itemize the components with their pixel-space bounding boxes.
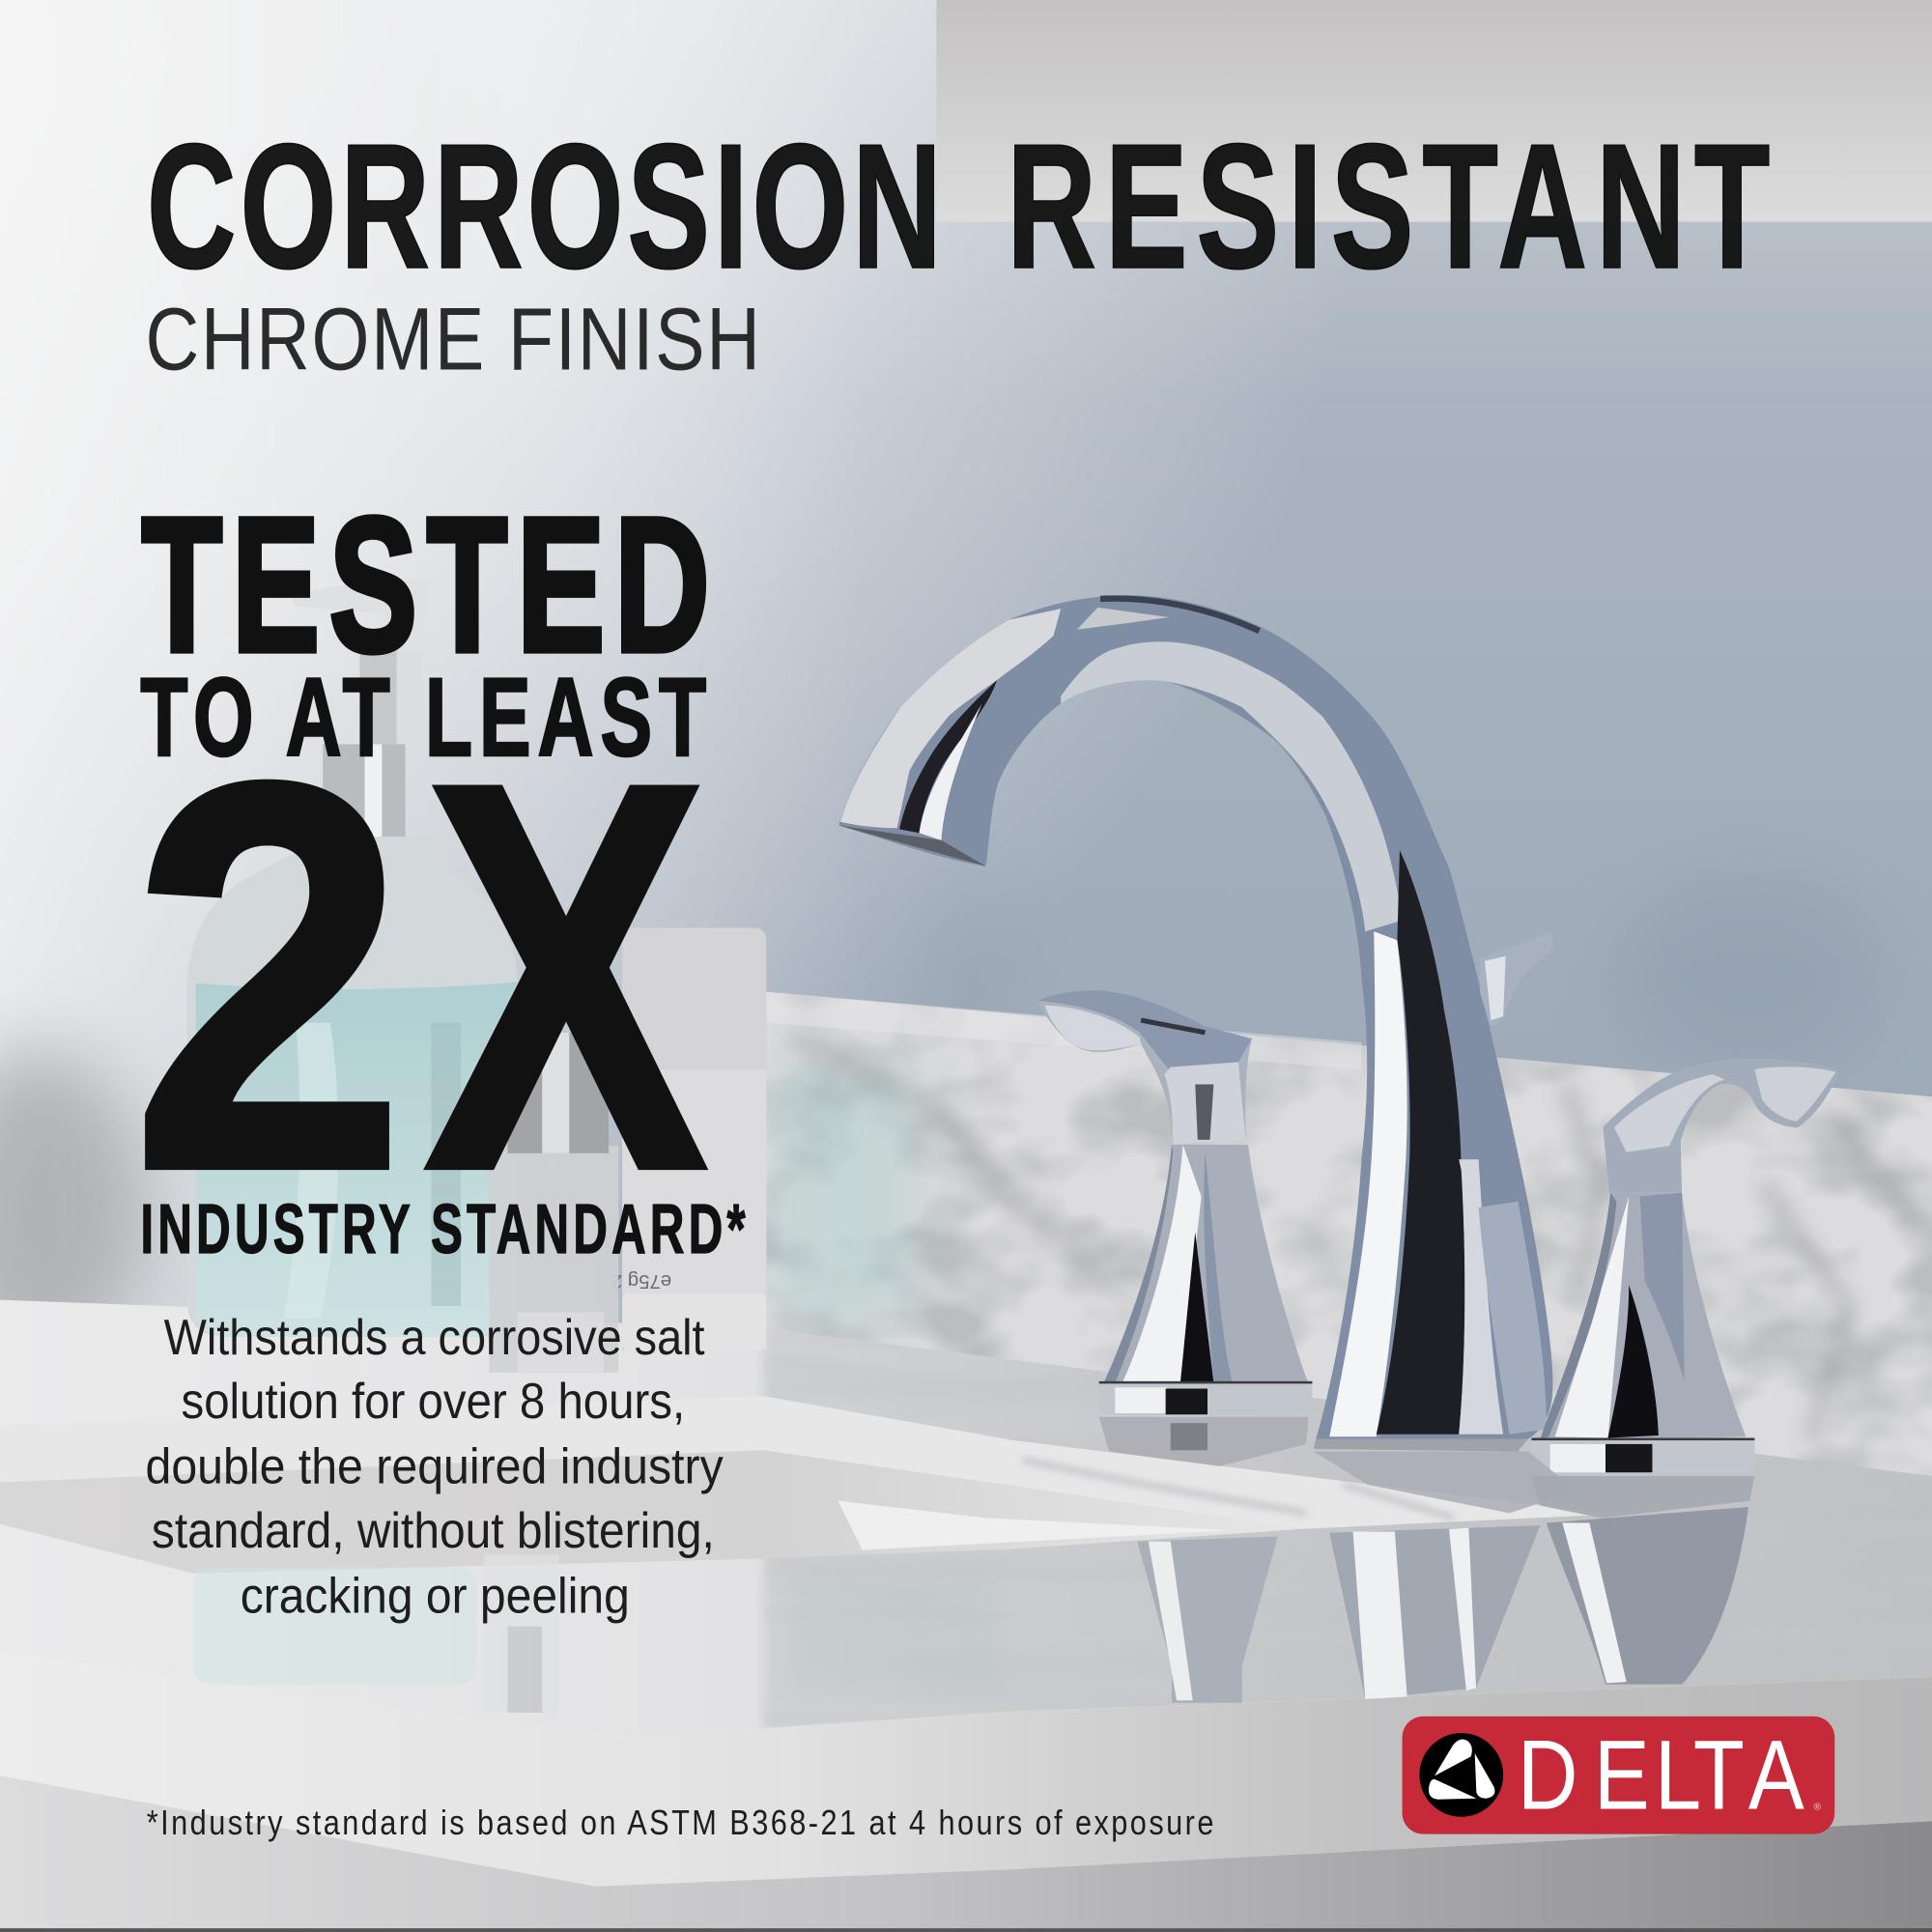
title: CORROSION — [147, 106, 942, 305]
body text: standard, without blistering, — [152, 1503, 715, 1559]
body text: double the required industry — [146, 1439, 724, 1495]
title: RESISTANT — [1007, 106, 1770, 305]
photo: jar — [611, 927, 766, 1350]
headline: industry standard: INDUSTRY STANDARD* — [140, 1191, 746, 1269]
photo: marble backsplash — [764, 985, 1932, 1479]
title — [147, 106, 1770, 305]
faucet: lift rod — [1480, 931, 1553, 1025]
body text: solution for over 8 hours, — [182, 1374, 685, 1430]
photo: small bottle — [489, 1033, 618, 1374]
photo: jar: e75g 2 — [611, 1270, 671, 1292]
body text: cracking or peeling — [241, 1569, 630, 1625]
photo: soap dispenser — [187, 579, 518, 1337]
photo: vanity counter and sink — [0, 1300, 1932, 1932]
photo: counter reflection of bottles — [193, 1555, 998, 1713]
headline: 2X — [130, 668, 710, 1284]
logo: Delta: ® — [1814, 1803, 1822, 1813]
faucet: right handle — [1531, 1059, 1839, 1474]
logo: Delta: DELTA — [1518, 1720, 1804, 1831]
photo background: bathroom wall — [0, 0, 1932, 1368]
faucet: spout — [839, 595, 1552, 1452]
subtitle: CHROME FINISH — [146, 289, 760, 388]
body text — [146, 1310, 724, 1625]
footnote: *Industry standard is based on ASTM B368-21 at 4 hours of exposure — [147, 1804, 1213, 1843]
logo: Delta — [1403, 1717, 1834, 1834]
faucet: counter reflections — [1099, 1417, 1754, 1703]
headline: tested: TESTED — [142, 477, 710, 691]
faucet: left handle — [1037, 990, 1312, 1414]
body text: Withstands a corrosive salt — [164, 1310, 705, 1366]
headline: to at least: TO AT LEAST — [140, 655, 706, 779]
headline: 2X: 2 — [130, 668, 407, 1284]
headline: 2X: X — [424, 668, 710, 1284]
